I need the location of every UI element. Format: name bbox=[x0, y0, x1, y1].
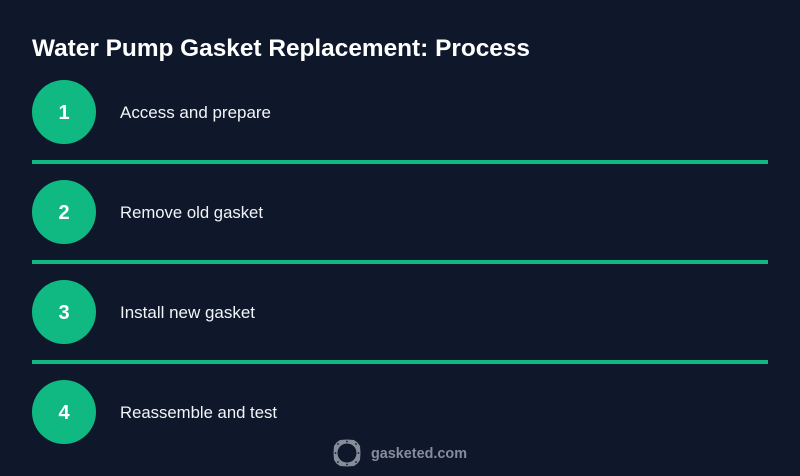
step 4 label: Reassemble and test bbox=[120, 404, 277, 422]
step 2 bbox=[32, 180, 263, 244]
step 3 bbox=[32, 280, 255, 344]
icon: gasket ring bbox=[334, 440, 360, 466]
step 2 badge: 2 bbox=[58, 202, 70, 224]
step 3 badge: 3 bbox=[58, 302, 70, 324]
brand name: gasketed.com bbox=[371, 446, 467, 462]
step 4 badge bbox=[32, 380, 96, 444]
title: Water Pump Gasket Replacement: Process bbox=[32, 35, 530, 62]
step 1 badge: 1 bbox=[58, 102, 70, 124]
step 1 label: Access and prepare bbox=[120, 104, 271, 122]
step 4 badge: 4 bbox=[58, 402, 70, 424]
step 3 label: Install new gasket bbox=[120, 304, 255, 322]
step 3 badge bbox=[32, 280, 96, 344]
step 4 bbox=[32, 380, 277, 444]
step 2 label: Remove old gasket bbox=[120, 204, 263, 222]
footer logo bbox=[334, 440, 467, 466]
step 1 bbox=[32, 80, 271, 144]
step 1 badge bbox=[32, 80, 96, 144]
step 2 badge bbox=[32, 180, 96, 244]
